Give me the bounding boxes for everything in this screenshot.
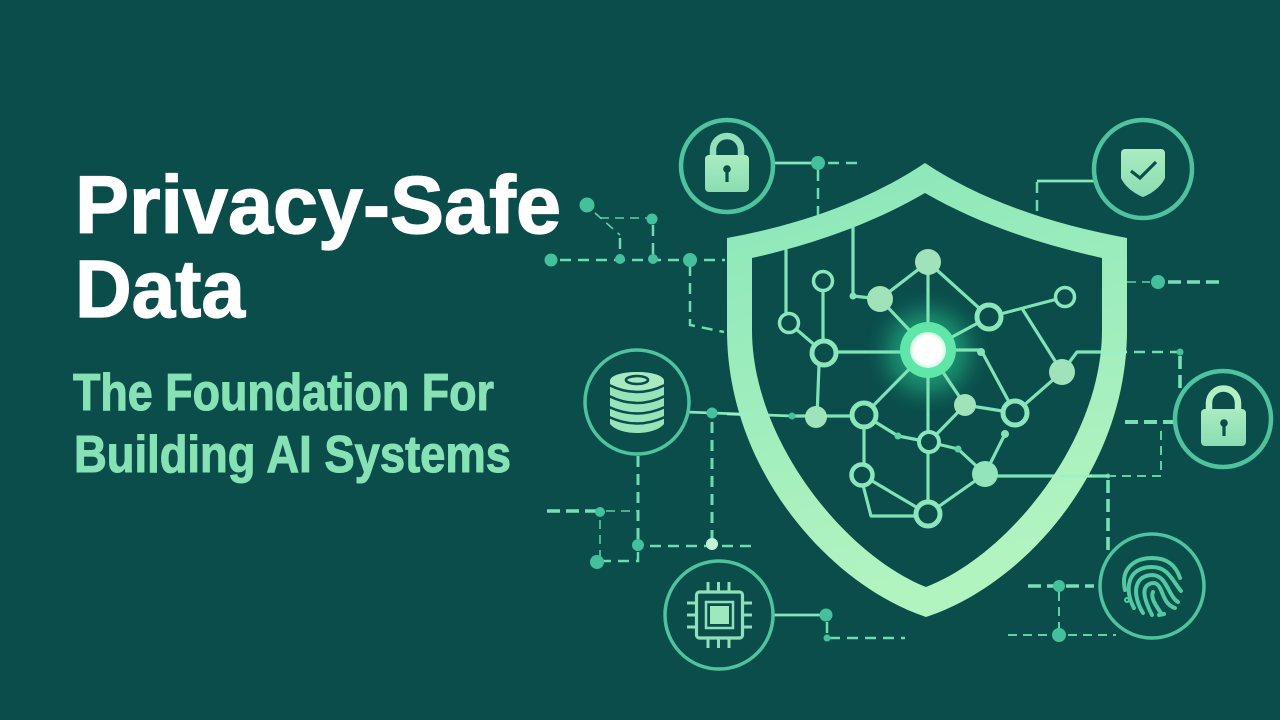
top left lock connector: [770, 156, 862, 215]
title: Privacy-Safe: [75, 160, 561, 251]
database connectors: [547, 408, 792, 569]
icon: fingerprint: [1100, 534, 1204, 638]
title: Data: [75, 244, 246, 335]
neural network lines: [786, 228, 1118, 516]
subtitle: Building AI Systems: [74, 426, 511, 484]
left dashed circuit network: [544, 198, 725, 332]
subtitle: The Foundation For: [73, 364, 494, 422]
icon: shield check: [1094, 120, 1192, 218]
network nodes: [780, 249, 1075, 526]
icon: padlock right: [1175, 371, 1271, 467]
icon: padlock top left: [681, 120, 773, 212]
top right shield connector: [1037, 181, 1096, 215]
central glowing node: [900, 322, 956, 378]
icon: microchip: [665, 561, 773, 669]
chip connectors: [773, 608, 905, 642]
right dashed connector: [1127, 275, 1225, 289]
title: [75, 160, 561, 335]
icon: database: [585, 350, 689, 454]
shield: [727, 163, 1127, 617]
lines crossing shield band: [727, 352, 1127, 476]
fingerprint connectors: [1008, 580, 1116, 642]
subtitle: [73, 364, 511, 484]
right lock connectors: [1106, 348, 1184, 556]
central glow: [862, 286, 994, 418]
